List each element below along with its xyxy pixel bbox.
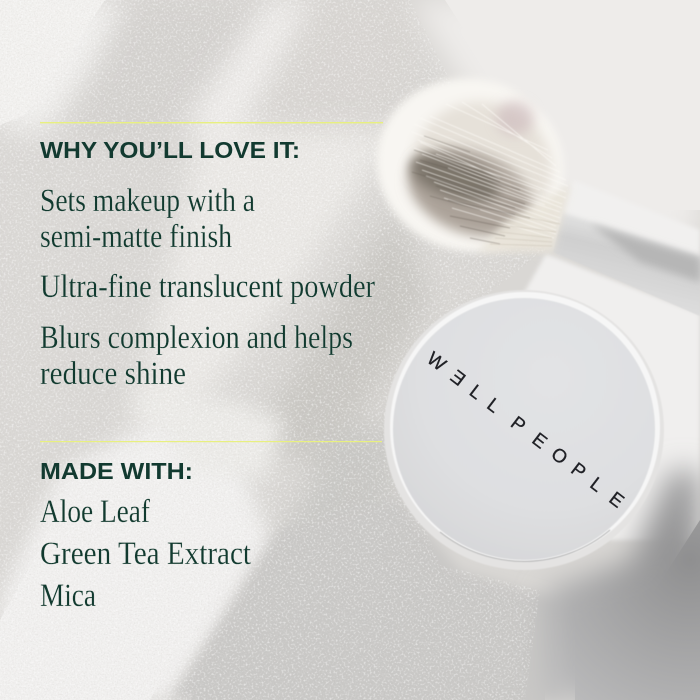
makeup brush xyxy=(357,58,700,316)
benefit: translucent powder: Ultra-fine translucent powder xyxy=(40,269,375,305)
divider: top xyxy=(40,122,383,123)
jar lid face xyxy=(393,298,655,560)
ingredient: green tea extract: Green Tea Extract xyxy=(40,536,251,572)
powder jar xyxy=(384,290,664,570)
background: bright patch core xyxy=(0,445,245,700)
bristle strands: light xyxy=(412,102,568,238)
background: gray powder core xyxy=(190,520,545,700)
benefit: semi-matte finish: semi-matte finish xyxy=(40,219,232,255)
jar lid edge xyxy=(390,292,660,562)
divider: bottom xyxy=(40,441,382,442)
bristle strands: dark xyxy=(412,136,530,244)
brush handle xyxy=(553,180,700,316)
background: edge fill, top corners xyxy=(0,0,105,125)
jar lid crease xyxy=(440,530,610,561)
logo: WELL PEOPLE: WƎLL PEOPLE xyxy=(423,348,628,513)
background: white surface and corner shadow xyxy=(520,254,700,700)
text column xyxy=(40,122,383,614)
ingredient: aloe leaf: Aloe Leaf xyxy=(40,494,150,530)
jar outer skirt xyxy=(384,290,664,570)
benefit: blurs complexion: Blurs complexion and helps xyxy=(40,320,353,356)
brush head xyxy=(357,58,583,272)
benefit: semi-matte finish: Sets makeup with a xyxy=(40,183,255,219)
heading: made with: MADE WITH: xyxy=(40,458,193,484)
background: powder specks xyxy=(0,0,540,700)
ingredient: mica: Mica xyxy=(40,578,96,614)
background: bright light patch, bottom left xyxy=(0,420,270,700)
background: gray powder, bottom centre xyxy=(170,500,560,700)
heading: why you'll love it: WHY YOU’LL LOVE IT: xyxy=(40,137,300,163)
benefit: blurs complexion: reduce shine xyxy=(40,356,186,392)
bristle strands: cream base xyxy=(490,215,560,246)
